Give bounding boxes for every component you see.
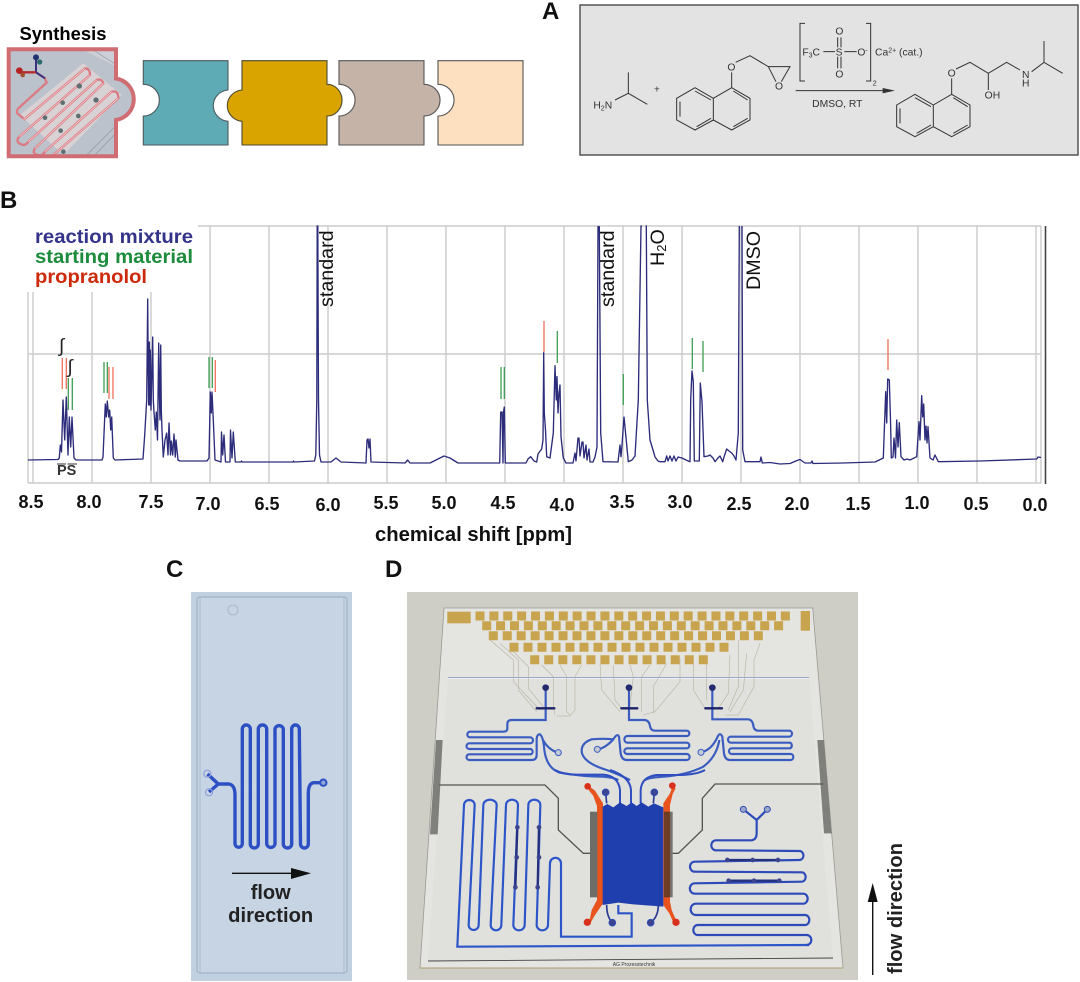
right serpentine and outlet	[645, 688, 793, 780]
connecting channels	[555, 770, 705, 803]
catalyst: calcium triflate: O	[835, 27, 843, 38]
peak labels	[316, 229, 765, 307]
molecule: naphthyl glycidyl ether: O	[727, 63, 735, 74]
integral symbols	[58, 336, 74, 378]
catalyst: calcium triflate: (cat.)	[896, 48, 923, 59]
integral symbols: ∫	[58, 336, 66, 357]
x axis tick labels: 3.0	[667, 492, 693, 512]
x axis tick labels: 0.5	[963, 494, 989, 514]
flow direction label	[228, 882, 313, 927]
catalyst: calcium triflate: O	[857, 48, 865, 59]
reaction arrow	[796, 88, 895, 93]
panel A: reaction scheme	[580, 5, 1078, 155]
panel label B: B	[0, 187, 17, 214]
flow direction label: flow	[251, 882, 291, 904]
legend	[35, 227, 193, 288]
x axis tick labels: 5.0	[431, 493, 457, 513]
legend: reaction mixture	[35, 227, 193, 248]
integral symbols: ∫	[66, 357, 74, 378]
peak labels: standard	[597, 230, 619, 307]
dark traces	[439, 784, 823, 853]
heading: Synthesis: Synthesis	[20, 23, 106, 44]
peak markers: starting material	[68, 331, 703, 410]
left serpentine and outlet	[466, 688, 618, 780]
catalyst: calcium triflate: 2+	[888, 47, 896, 54]
peak labels: 2	[654, 245, 669, 252]
catalyst: calcium triflate: Ca	[875, 48, 888, 59]
puzzle piece: synthesis photo	[9, 49, 140, 158]
plus sign: +	[654, 84, 660, 95]
panel D: microfluidic chip photo	[407, 592, 858, 980]
molecule: naphthyl glycidyl ether	[677, 56, 790, 130]
molecule: propranolol: O	[948, 69, 956, 80]
x axis title: chemical shift [ppm]	[375, 524, 572, 546]
flow arrow vertical	[868, 883, 878, 975]
gold contact pads	[476, 616, 790, 660]
catalyst: calcium triflate: F	[802, 48, 809, 59]
peak labels: standard	[316, 230, 338, 307]
spectrum trace	[28, 226, 1041, 464]
conditions: DMSO, RT	[812, 99, 863, 110]
puzzle piece: peach	[438, 61, 523, 145]
molecule: propranolol: OH	[985, 91, 1000, 102]
panel: puzzle workflow	[9, 23, 523, 158]
x axis tick labels: 1.5	[845, 494, 871, 514]
x axis tick labels	[18, 492, 1048, 515]
panel label D: D	[385, 556, 402, 583]
x axis tick labels: 4.5	[490, 493, 516, 513]
molecule: isopropylamine: H	[593, 100, 601, 111]
thermal vias	[515, 827, 779, 887]
inlets and electrodes	[537, 705, 722, 712]
PS annotation: PS	[57, 463, 77, 479]
x axis tick labels: 0.0	[1022, 495, 1048, 515]
catalyst: calcium triflate: S	[836, 48, 843, 59]
molecule: isopropylamine: N	[605, 100, 612, 111]
peak labels: O	[647, 229, 669, 245]
x axis tick labels: 1.0	[904, 493, 930, 513]
panel label C: C	[166, 556, 183, 583]
puzzle piece: gold	[227, 61, 342, 145]
x axis tick labels: 7.5	[138, 492, 164, 512]
x axis tick labels: 6.5	[254, 494, 280, 514]
x axis tick labels: 8.5	[18, 492, 44, 512]
lower channel network	[430, 740, 832, 947]
left serpentine	[457, 800, 809, 947]
x axis tick labels: 3.5	[609, 492, 635, 512]
x axis tick labels: 5.5	[373, 493, 399, 513]
molecule: isopropylamine	[593, 72, 647, 112]
side contact strips	[430, 740, 443, 834]
x axis tick labels: 8.0	[76, 492, 102, 512]
x axis tick labels: 2.5	[726, 494, 752, 514]
molecule: isopropylamine: 2	[601, 105, 605, 112]
ports	[602, 789, 770, 926]
legend: starting material	[35, 247, 193, 268]
electrode traces	[490, 640, 760, 716]
axis end line	[1044, 226, 1046, 484]
x axis tick labels: 2.0	[784, 494, 810, 514]
puzzle piece: taupe	[339, 61, 440, 145]
catalyst: calcium triflate: 3	[809, 53, 813, 60]
flow direction label: direction	[228, 905, 313, 927]
x axis tick labels: 7.0	[195, 494, 221, 514]
flow direction rotated label: flow direction	[885, 843, 907, 974]
side channels to ports	[606, 792, 658, 923]
glass chip	[420, 608, 843, 968]
catalyst: calcium triflate: O	[835, 69, 843, 80]
panel B: NMR spectrum chart	[18, 226, 1048, 546]
molecule: propranolol	[897, 41, 1063, 137]
catalyst: calcium triflate	[800, 23, 923, 87]
electrode bars	[590, 812, 597, 897]
upper channel network	[466, 640, 793, 780]
serpentine channel	[204, 725, 326, 848]
puzzle piece: teal	[143, 61, 228, 145]
reaction chamber	[603, 802, 663, 907]
panel C: glass chip photo	[191, 592, 352, 981]
peak labels: DMSO	[743, 231, 765, 290]
right serpentine	[690, 809, 811, 945]
flow arrow	[232, 868, 311, 879]
catalyst: calcium triflate: C	[813, 48, 821, 59]
molecule: propranolol: H	[1022, 79, 1029, 90]
catalyst: calcium triflate: 2	[873, 78, 877, 87]
molecule: naphthyl glycidyl ether: O	[775, 81, 783, 92]
chip caption: AG Prozesstechnik	[613, 962, 656, 968]
x axis tick labels: 6.0	[315, 495, 341, 515]
peak labels: H	[647, 252, 669, 266]
peak markers: propranolol	[62, 321, 888, 399]
molecule: propranolol: N	[1022, 70, 1029, 81]
catalyst: calcium triflate: -	[865, 47, 868, 54]
orange channels	[587, 787, 603, 924]
x axis tick labels: 4.0	[549, 495, 575, 515]
legend: propranolol	[35, 267, 147, 288]
middle serpentine and outlet	[582, 688, 690, 780]
